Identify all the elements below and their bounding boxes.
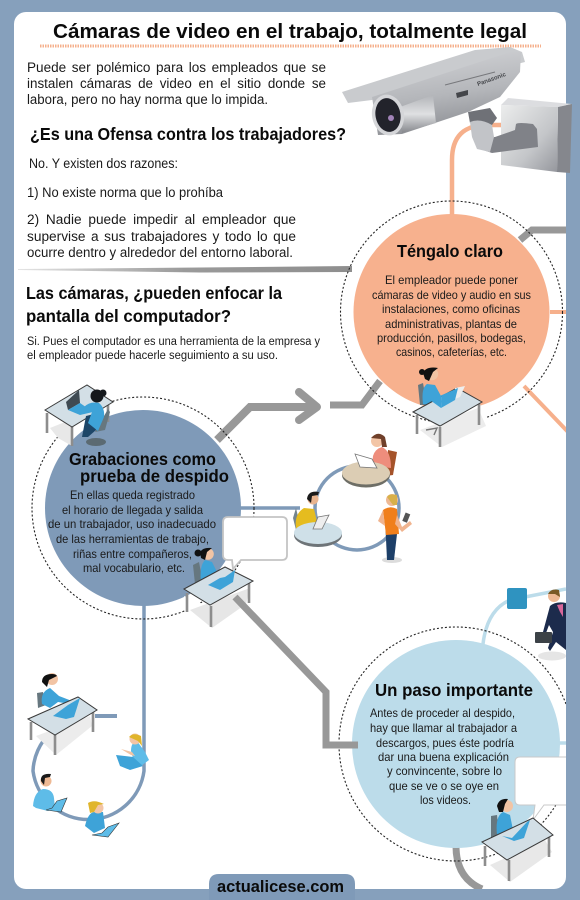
- icon: man with laptop, lower ring: [33, 774, 67, 812]
- pantalla text: el empleador puede hacerle seguimiento a su uso.: [27, 350, 278, 362]
- divider wedge: [18, 266, 352, 272]
- intro paragraph: instalen cámaras de video en el sitio donde se: [27, 76, 326, 91]
- reasons text: No. Y existen dos razones:: [29, 156, 178, 171]
- title dotted underline: [40, 44, 541, 48]
- reasons text: [27, 156, 296, 260]
- circle: Un paso importante: descargos, pues éste podría: [376, 736, 514, 750]
- circle: Grabaciones: mal vocabulario, etc.: [83, 561, 185, 575]
- circle: Un paso importante: los videos.: [420, 793, 471, 807]
- reasons text: 2) Nadie puede impedir al empleador que: [27, 212, 296, 227]
- reasons text: supervise a sus trabajadores y todo lo que: [27, 229, 296, 244]
- circle: Téngalo claro: Téngalo claro: [397, 241, 503, 261]
- icon: man standing with phone: [378, 494, 412, 563]
- pantalla text: [27, 336, 320, 362]
- circle: Un paso importante: Antes de proceder al despido,: [370, 706, 515, 720]
- circle: Téngalo claro: El empleador puede poner: [385, 273, 518, 287]
- circle: Un paso importante: y convincente, sobre lo: [387, 764, 502, 778]
- circle: Grabaciones: En ellas queda registrado: [70, 488, 195, 502]
- icon: speech box and worker at desk, center: [184, 517, 287, 630]
- circle: Un paso importante: Un paso importante: [375, 680, 533, 700]
- circle: Un paso importante: [339, 627, 573, 861]
- title: Cámaras de video en el trabajo, totalmente legal: [53, 21, 527, 43]
- circle: Grabaciones: [32, 397, 254, 619]
- circle: Grabaciones: Grabaciones como: [69, 449, 216, 469]
- circle: Téngalo claro: administrativas, plantas de: [385, 317, 517, 331]
- icon: worker at desk, Téngalo claro: [413, 368, 490, 450]
- circle: Grabaciones: el horario de llegada y salida: [62, 503, 203, 517]
- icon: blue square: [507, 588, 527, 609]
- heading: pantalla: pantalla del computador?: [26, 306, 231, 326]
- heading: pantalla: [26, 283, 282, 326]
- pantalla text: Si. Pues el computador es una herramienta de la empresa y: [27, 336, 320, 348]
- icon: blonde woman with laptop, ring bottom: [85, 801, 119, 837]
- icon: security camera: [342, 47, 572, 173]
- grey connector: center desk to Un paso importante: [235, 597, 358, 745]
- connector lines: [33, 125, 568, 889]
- icon: man in yellow at round table: [293, 492, 342, 547]
- circle: Un paso importante: que se ve o se oye en: [389, 779, 499, 793]
- footer tab: actualicese.com: [217, 878, 344, 896]
- circle: Grabaciones: de las herramientas de trabajo,: [56, 532, 209, 546]
- heading: pantalla: Las cámaras, ¿pueden enfocar la: [26, 283, 282, 303]
- circle: Téngalo claro: cámaras de video y audio en sus: [372, 288, 531, 302]
- icon: woman at round table: [342, 434, 397, 488]
- reasons text: ocurre dentro y alrededor del entorno laboral.: [27, 245, 293, 260]
- circle: Téngalo claro: instalaciones, como oficinas: [382, 302, 520, 316]
- icon: worker on desk with speech box, bottom right: [482, 757, 570, 882]
- circle: Téngalo claro: casinos, cafeterías, etc.: [396, 345, 507, 359]
- reasons text: 1) No existe norma que lo prohíba: [27, 185, 223, 200]
- intro paragraph: Puede ser polémico para los empleados que se: [27, 60, 326, 75]
- icon: worker at desk, bottom left: [28, 673, 97, 755]
- circle: Un paso importante: hay que llamar al trabajador a: [370, 721, 517, 735]
- intro paragraph: [27, 60, 326, 107]
- footer tab: [209, 874, 355, 900]
- icon: woman with laptop, right of ring: [116, 734, 149, 770]
- circle: Grabaciones: riñas entre compañeros,: [73, 547, 192, 561]
- icon: businessman: [535, 590, 566, 660]
- icon: security camera: Panasonic: [477, 72, 508, 88]
- circle: Grabaciones: prueba de despido: [80, 466, 229, 486]
- icon: worker at desk, top left: [45, 385, 113, 446]
- circle: Téngalo claro: [340, 201, 562, 423]
- circle: Téngalo claro: producción, pasillos, bodegas,: [377, 331, 526, 345]
- intro paragraph: labora, pero no hay norma que lo impida.: [27, 92, 268, 107]
- heading: ofensa: ¿Es una Ofensa contra los trabajadores?: [30, 124, 346, 144]
- circle: Grabaciones: de un trabajador, uso inadecuado: [48, 517, 216, 531]
- circle: Un paso importante: dar una buena explicación: [378, 750, 509, 764]
